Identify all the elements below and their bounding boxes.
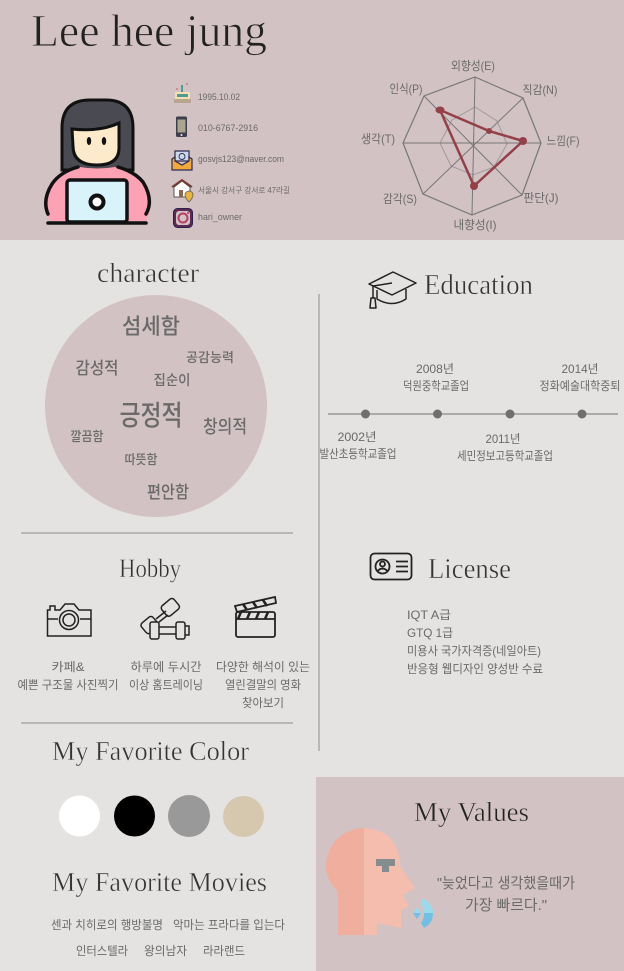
title: name: Lee hee jung bbox=[31, 5, 267, 56]
chart: personality radar bbox=[361, 59, 580, 232]
text: movie titles: 라라랜드 bbox=[203, 944, 245, 958]
swatch: black bbox=[114, 796, 155, 836]
word cloud: traits: 깔끔함 bbox=[70, 429, 104, 444]
text: license list: GTQ 1급 bbox=[407, 626, 453, 640]
labels: radar axes: 내향성(I) bbox=[454, 218, 496, 232]
labels: radar axes: 생각(T) bbox=[361, 132, 395, 146]
text: 2008: 덕원중학교졸업 bbox=[403, 379, 469, 393]
text: 2011 bbox=[457, 432, 553, 463]
text: 2008 bbox=[403, 362, 469, 393]
text: quote: 가장 빠르다." bbox=[465, 897, 547, 914]
icon: home with pin bbox=[172, 180, 193, 202]
text: cafe hobby bbox=[18, 660, 118, 692]
swatch: gray bbox=[168, 795, 210, 837]
swatch: white bbox=[59, 796, 100, 836]
word cloud: traits: 감성적 bbox=[76, 359, 118, 378]
labels: radar axes: 판단(J) bbox=[524, 191, 558, 205]
heading: my values: My Values bbox=[414, 797, 529, 827]
word cloud circle bbox=[45, 295, 267, 517]
word cloud: traits: 긍정적 bbox=[120, 400, 182, 431]
chart: education timeline bbox=[320, 362, 620, 463]
text: 2014: 2014년 bbox=[562, 362, 598, 376]
word cloud: traits: 창의적 bbox=[203, 417, 247, 437]
text: movie hobby bbox=[216, 660, 310, 710]
text: cafe hobby: 카페& bbox=[52, 660, 84, 674]
text: movie hobby: 찾아보기 bbox=[242, 696, 284, 710]
swatch: beige bbox=[223, 796, 264, 837]
icon: instagram bbox=[174, 208, 192, 228]
icon: film clapper bbox=[235, 597, 276, 637]
text: quote: "늦었다고 생각했을때가 bbox=[437, 875, 575, 892]
heading: favorite movies: My Favorite Movies bbox=[52, 867, 267, 897]
text: movie titles: 왕의남자 bbox=[144, 944, 187, 958]
heading: favorite color: My Favorite Color bbox=[52, 736, 249, 766]
text: 2002: 발산초등학교졸업 bbox=[320, 447, 396, 461]
labels: radar axes: 감각(S) bbox=[383, 192, 417, 206]
icon: graduation cap bbox=[369, 272, 416, 308]
text: movie titles bbox=[51, 917, 285, 958]
labels: radar axes: 인식(P) bbox=[390, 82, 423, 96]
text: 2008: 2008년 bbox=[416, 362, 454, 376]
word cloud: traits: 공감능력 bbox=[186, 350, 234, 365]
panel: favorite color bbox=[52, 736, 264, 837]
icon: person with laptop bbox=[46, 100, 150, 223]
text: movie titles: 센과 치히로의 행방불명 bbox=[51, 917, 163, 932]
text: 2014 bbox=[540, 362, 620, 393]
text: 2002 bbox=[320, 430, 396, 461]
panel: my values bbox=[316, 777, 624, 971]
text: instagram handle: hari_owner bbox=[198, 212, 242, 223]
text: license list: 반응형 웹디자인 양성반 수료 bbox=[407, 662, 543, 676]
text: 2002: 2002년 bbox=[338, 430, 376, 444]
text: movie hobby: 열린결말의 영화 bbox=[225, 678, 301, 692]
icon: dumbbells bbox=[140, 597, 189, 639]
text: cafe hobby: 예쁜 구조물 사진찍기 bbox=[18, 678, 118, 692]
text: phone number: 010-6767-2916 bbox=[198, 123, 258, 134]
panel: favorite movies bbox=[51, 867, 285, 958]
labels: radar axes bbox=[361, 59, 580, 232]
icon: camera bbox=[48, 604, 91, 636]
icon: phone bbox=[176, 116, 187, 137]
text: license list: IQT A급 bbox=[407, 608, 451, 622]
text: movie titles: 인터스텔라 bbox=[76, 944, 128, 958]
heading: education: Education bbox=[424, 270, 533, 301]
heading: license: License bbox=[428, 554, 511, 585]
icon: birthday cake bbox=[174, 83, 191, 103]
word cloud: traits: 집순이 bbox=[154, 372, 190, 388]
labels: radar axes: 느낌(F) bbox=[546, 134, 580, 148]
text: 2011: 세민정보고등학교졸업 bbox=[457, 449, 553, 463]
text: workout hobby: 하루에 두시간 bbox=[130, 660, 202, 674]
word cloud: traits: 섬세함 bbox=[122, 314, 180, 339]
icon: mail bbox=[172, 151, 192, 170]
icon: speaking head bbox=[326, 828, 433, 935]
text: email: gosvjs123@naver.com bbox=[198, 154, 284, 165]
labels: radar axes: 외향성(E) bbox=[451, 59, 495, 73]
text: birth date: 1995.10.02 bbox=[198, 92, 240, 103]
panel: hobby bbox=[18, 554, 310, 710]
text: license list: 미용사 국가자격증(네일아트) bbox=[407, 644, 541, 658]
text: workout hobby: 이상 홈트레이닝 bbox=[129, 678, 203, 692]
icon: id card bbox=[370, 554, 412, 580]
panel: character bbox=[45, 258, 267, 517]
labels: radar axes: 직감(N) bbox=[522, 83, 558, 97]
text: quote bbox=[437, 875, 575, 914]
heading: character: character bbox=[97, 258, 199, 288]
panel: profile header bbox=[0, 0, 624, 240]
panel: license bbox=[370, 554, 543, 676]
word cloud: traits bbox=[70, 314, 247, 502]
text: workout hobby bbox=[129, 660, 203, 692]
panel: education bbox=[320, 270, 620, 463]
word cloud: traits: 편안함 bbox=[147, 483, 189, 502]
text: 2011: 2011년 bbox=[486, 432, 520, 446]
text: movie hobby: 다양한 해석이 있는 bbox=[216, 660, 310, 674]
heading: hobby: Hobby bbox=[119, 554, 181, 583]
text: movie titles: 악마는 프라다를 입는다 bbox=[173, 918, 285, 932]
text: license list bbox=[407, 608, 543, 676]
word cloud: traits: 따뜻함 bbox=[124, 452, 158, 467]
text: address: 서울시 강서구 강서로 47라길 bbox=[198, 185, 290, 195]
